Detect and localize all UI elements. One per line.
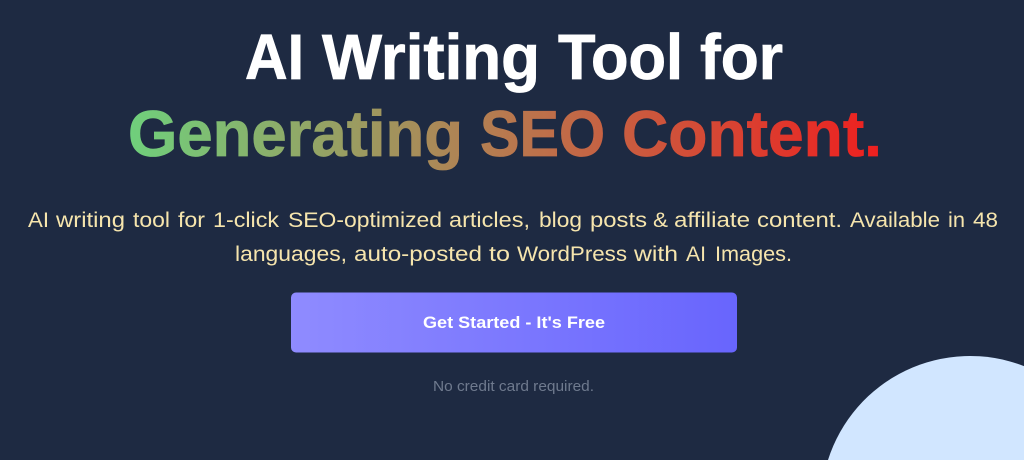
description: blog — [539, 208, 582, 232]
description: Images. — [715, 242, 792, 266]
description: & — [653, 208, 668, 232]
note: No credit card required. — [433, 379, 594, 395]
description: to — [489, 242, 510, 266]
description: SEO-optimized — [288, 208, 442, 232]
call to action button — [291, 292, 737, 352]
call to action button: Get Started - It's Free — [423, 313, 605, 332]
description: tool — [133, 208, 170, 232]
description: with — [633, 242, 678, 266]
description: Available — [850, 208, 940, 232]
title line 2 gradient — [128, 97, 882, 170]
decorative circle — [828, 356, 1024, 460]
title line 1: Tool — [558, 21, 683, 93]
title line 2 gradient: SEO — [480, 97, 605, 170]
description: WordPress — [517, 242, 627, 266]
description: 1-click — [213, 208, 279, 232]
description: for — [178, 208, 205, 232]
description: 48 — [973, 208, 998, 232]
title line 1: for — [700, 21, 783, 93]
title line 2 gradient: Generating — [128, 97, 463, 170]
description: writing — [55, 208, 125, 232]
description: languages, — [235, 242, 347, 266]
description — [28, 208, 998, 266]
description: AI — [28, 208, 49, 232]
description: affiliate — [674, 208, 750, 232]
description: posts — [590, 208, 647, 232]
title line 2 gradient: Content. — [622, 97, 882, 170]
title line 1: Writing — [322, 21, 540, 93]
description: content. — [757, 208, 842, 232]
description: articles, — [449, 208, 530, 232]
description: in — [948, 208, 965, 232]
description: AI — [686, 242, 706, 266]
description: auto-posted — [354, 242, 482, 266]
title line 1: AI — [245, 21, 304, 93]
title line 1 — [245, 21, 783, 93]
